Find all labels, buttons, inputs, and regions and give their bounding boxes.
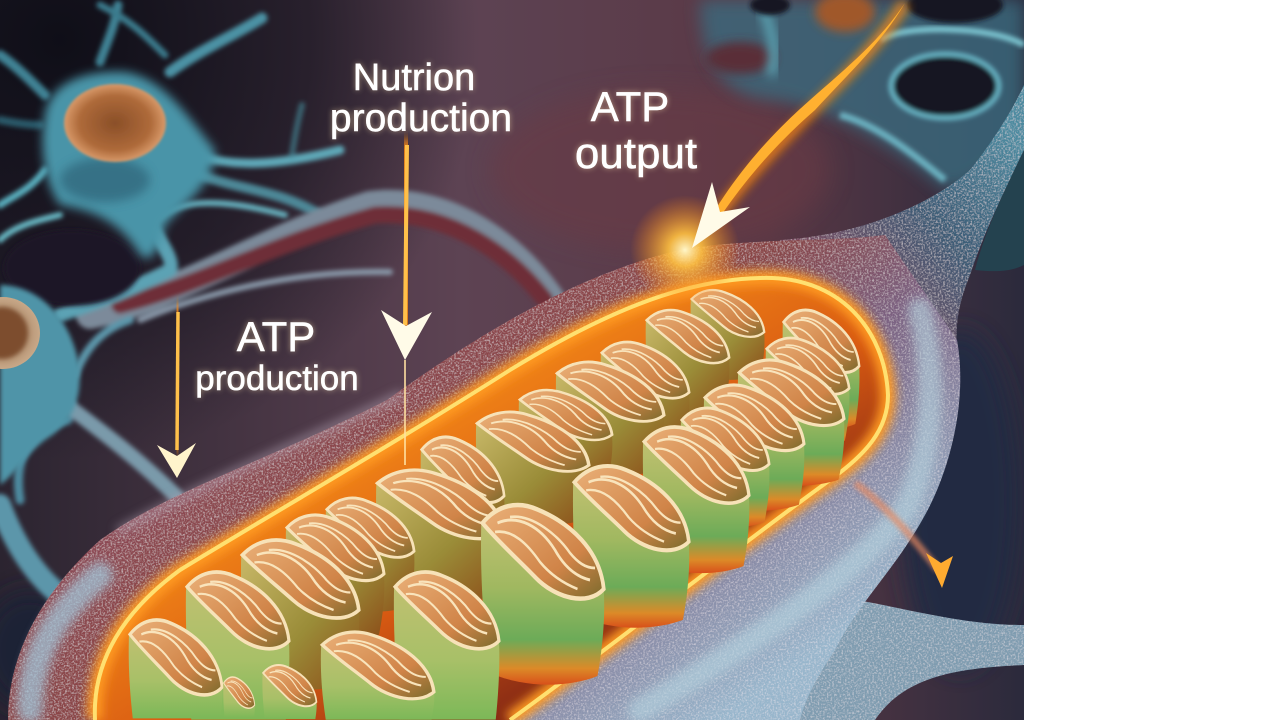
cristae folds [129,290,859,720]
label: Nutrion production [330,57,512,140]
long branch with maroon core [0,204,555,595]
label: ATP output [575,83,697,178]
label: ATP production: production [195,359,359,398]
label: ATP output: output [575,129,697,178]
inner chamber with glowing border [95,278,888,720]
illustration: mitochondrion inside a neuron network [0,0,1024,720]
mitochondrion outer membrane [8,235,960,720]
background [0,0,1024,720]
arrow: lower right [855,483,953,588]
label: Nutrion production: Nutrion [353,57,475,99]
arrow: ATP output [630,3,905,305]
right trunk and branches [780,85,1024,720]
arrow: ATP production down [157,305,196,478]
cell body left with nucleus [0,285,80,485]
label: ATP production [195,313,359,398]
hole behind left branches [4,230,140,306]
dark corner and warm shading [0,0,1020,710]
neuron network, top left [0,5,340,240]
label: ATP output: ATP [591,83,669,130]
neuron network, top right [700,0,1024,190]
membrane highlights [30,310,930,710]
label: ATP production: ATP [237,313,315,360]
arrow: nutrition down [381,140,432,465]
label: Nutrion production: production [330,97,512,140]
cell body top left with nucleus [43,72,215,258]
